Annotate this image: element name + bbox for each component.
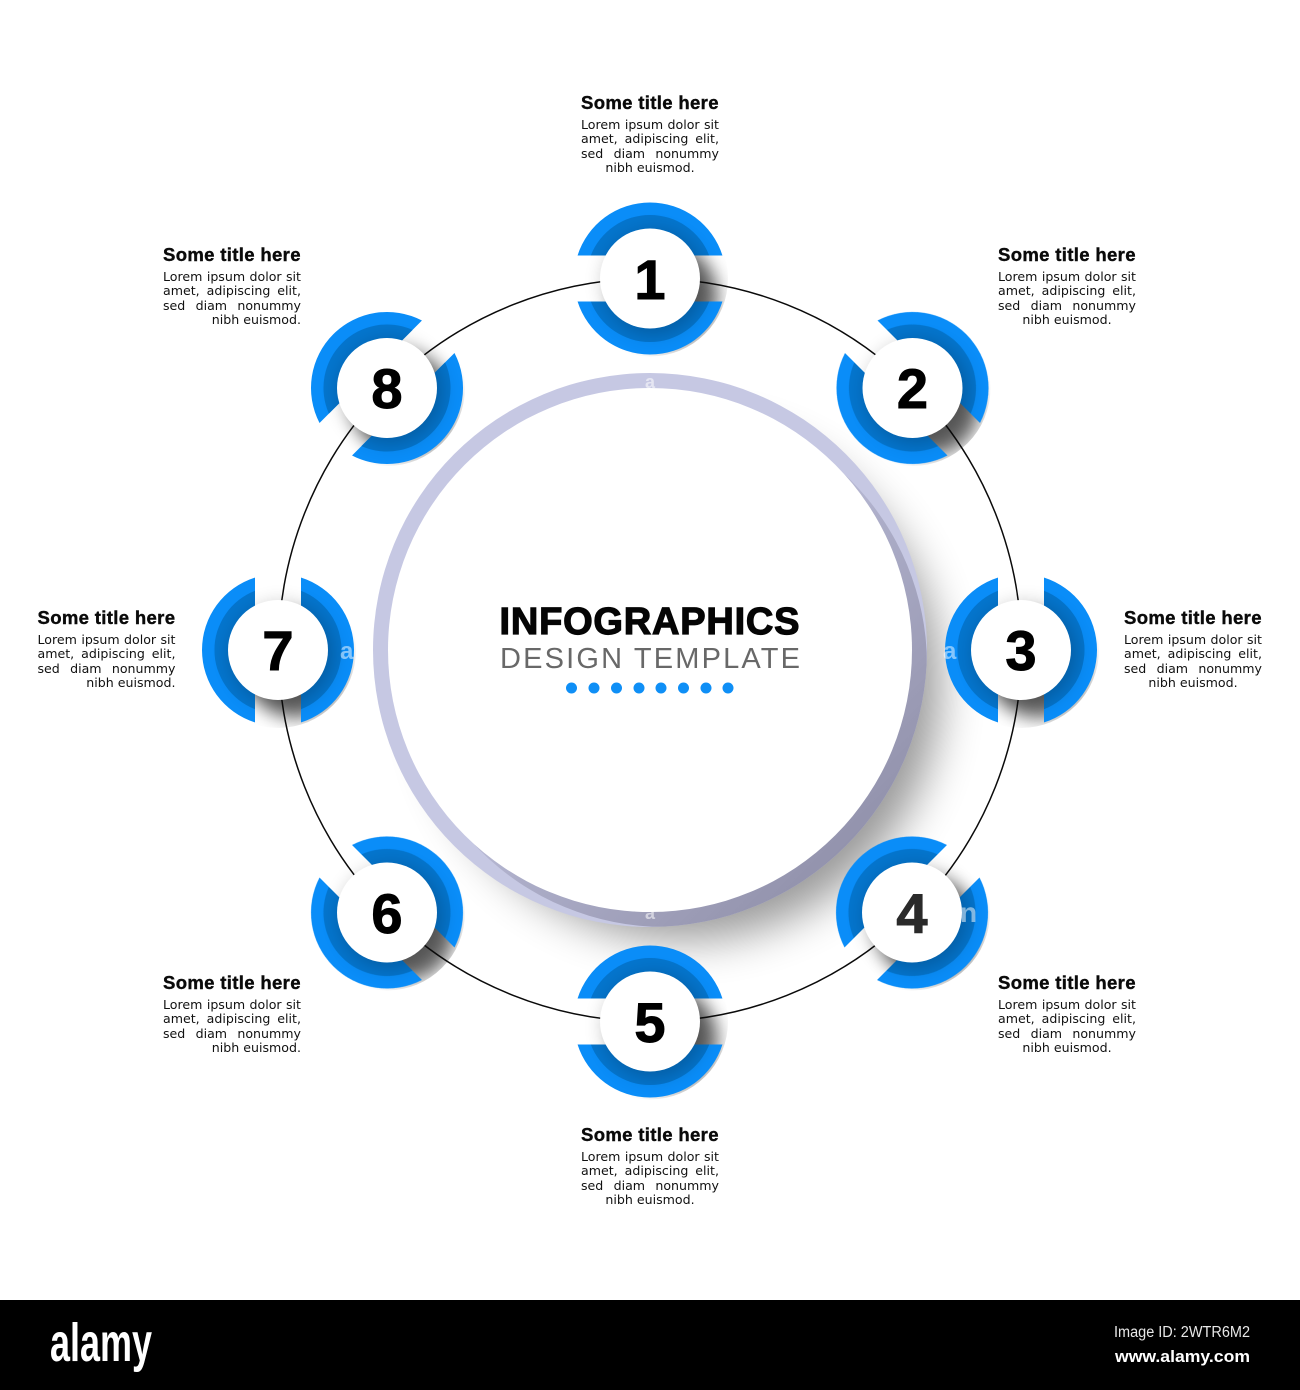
text block 6: amet, adipiscing elit, <box>163 1011 301 1026</box>
text block 7 <box>38 607 176 690</box>
text block 3: Some title here <box>1124 607 1262 628</box>
text block 2: sed diam nonummy <box>998 298 1136 313</box>
text block 1 <box>581 92 719 350</box>
text block 7: Some title here <box>38 607 175 628</box>
text block 1: nibh euismod. <box>605 160 695 175</box>
node 4 <box>862 862 962 962</box>
node 1: 1 <box>634 248 666 311</box>
text block 8: sed diam nonummy <box>163 298 301 313</box>
ring segments: node 4 <box>807 808 1017 1017</box>
text block 8: Some title here <box>163 244 301 265</box>
text block 2: nibh euismod. <box>1022 312 1112 327</box>
text block 1: Lorem ipsum dolor sit <box>581 117 719 132</box>
watermark fragments: a <box>340 638 354 665</box>
ring segments: node 7 <box>202 578 354 722</box>
text block 2: Lorem ipsum dolor sit <box>998 269 1136 284</box>
dots row <box>566 682 734 694</box>
text block 5: Some title here <box>581 1124 719 1145</box>
soft shading over rings <box>230 231 1077 1078</box>
ring segments: node 3 <box>945 578 1097 722</box>
text block 8: amet, adipiscing elit, <box>163 283 301 298</box>
text block 4: amet, adipiscing elit, <box>998 1011 1136 1026</box>
node 2 <box>862 338 962 438</box>
ring segments: node 8 <box>282 283 492 493</box>
ring segments: node 5 <box>578 945 722 1098</box>
node 2: 2 <box>897 357 928 420</box>
connecting circle line <box>278 278 1022 1022</box>
node 6 <box>337 862 437 962</box>
text block 4: sed diam nonummy <box>998 1026 1136 1041</box>
text block 8: Lorem ipsum dolor sit <box>163 269 301 284</box>
node 3 <box>971 600 1071 700</box>
ring segments: node 1 <box>578 202 722 355</box>
central circle: a <box>645 372 656 392</box>
text block 1: amet, adipiscing elit, <box>581 131 719 146</box>
text block 7: amet, adipiscing elit, <box>38 646 176 661</box>
text block 5: sed diam nonummy <box>581 1178 719 1193</box>
ring segments: node 2 <box>808 283 1017 493</box>
text block 5: amet, adipiscing elit, <box>581 1163 719 1178</box>
text block 2: amet, adipiscing elit, <box>998 283 1136 298</box>
watermark fragments: n <box>960 897 977 928</box>
footer url: www.alamy.com <box>1114 1348 1250 1366</box>
text block 1: sed diam nonummy <box>581 146 719 161</box>
subheading: DESIGN TEMPLATE <box>500 643 800 675</box>
text block 7: Lorem ipsum dolor sit <box>38 632 176 647</box>
text block 5: nibh euismod. <box>605 1192 695 1207</box>
text block 8 <box>163 244 301 327</box>
text block 4: Some title here <box>998 972 1136 993</box>
node shadows under rings <box>246 247 1089 1090</box>
text block 4: nibh euismod. <box>1022 1040 1112 1055</box>
node 1 <box>600 228 700 328</box>
text block 6: nibh euismod. <box>212 1040 301 1055</box>
text block 1: Some title here <box>581 92 719 113</box>
node 3: 3 <box>1005 619 1037 682</box>
footer logo: alamy <box>50 1313 152 1373</box>
text block 6: Lorem ipsum dolor sit <box>163 997 301 1012</box>
node 6: 6 <box>371 882 403 945</box>
text block 3: sed diam nonummy <box>1124 661 1262 676</box>
text block 3: Lorem ipsum dolor sit <box>1124 632 1262 647</box>
central circle: a <box>645 903 656 923</box>
watermark fragments: a <box>943 638 957 665</box>
node 5 <box>600 972 700 1072</box>
ring segments: node 6 <box>282 808 492 1017</box>
text block 5: Lorem ipsum dolor sit <box>581 1149 719 1164</box>
central circle <box>373 372 940 940</box>
node 8 <box>337 338 437 438</box>
text block 3: nibh euismod. <box>1148 675 1238 690</box>
node 7: 7 <box>262 619 294 682</box>
text block 7: nibh euismod. <box>86 675 176 690</box>
watermark fragments <box>340 638 977 928</box>
footer image id: Image ID: 2WTR6M2 <box>1114 1324 1250 1341</box>
text block 5 <box>581 1124 719 1207</box>
text block 4 <box>998 972 1136 1055</box>
text block 4: Lorem ipsum dolor sit <box>998 997 1136 1012</box>
node 7 <box>228 600 328 700</box>
text block 6: sed diam nonummy <box>163 1026 301 1041</box>
heading: INFOGRAPHICS <box>500 601 800 643</box>
node 5: 5 <box>634 991 666 1054</box>
text block 3 <box>1124 607 1262 690</box>
node 4: 4 <box>896 882 928 945</box>
footer bar <box>0 1300 1300 1390</box>
text block 2 <box>998 244 1136 327</box>
text block 3: amet, adipiscing elit, <box>1124 646 1262 661</box>
text block 8: nibh euismod. <box>212 312 301 327</box>
node 8: 8 <box>371 357 403 420</box>
text block 6 <box>163 972 301 1055</box>
text block 6: Some title here <box>163 972 301 993</box>
text block 7: sed diam nonummy <box>38 661 176 676</box>
text block 2: Some title here <box>998 244 1136 265</box>
